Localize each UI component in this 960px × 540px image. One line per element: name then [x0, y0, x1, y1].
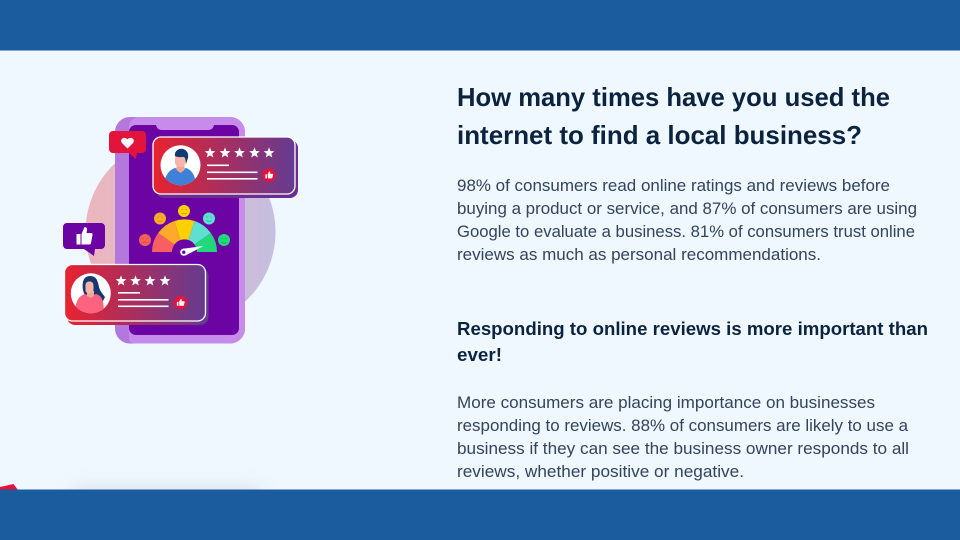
review card: four stars: [64, 264, 208, 325]
emoji: neutral: [178, 205, 190, 217]
review card: five stars: [153, 137, 298, 198]
second paragraph: responding to reviews. 88% of consumers are likely to use a: [457, 417, 909, 435]
subheading: ever!: [457, 344, 502, 365]
second paragraph: [457, 394, 909, 481]
illustration: phone with reviews: [63, 117, 298, 344]
phone body: [115, 117, 245, 344]
main heading: [457, 82, 890, 150]
bottom band: [0, 490, 960, 540]
icon: heart speech bubble: [109, 131, 146, 159]
rating stars: [205, 147, 274, 158]
gauge needle: [180, 246, 204, 256]
subheading: Responding to online reviews is more important than: [457, 318, 928, 339]
avatar: man: [160, 145, 200, 187]
intro paragraph: buying a product or service, and 87% of consumers are using: [457, 200, 917, 218]
top band: [0, 0, 960, 50]
emoji: happy: [203, 212, 215, 224]
intro paragraph: Google to evaluate a business. 81% of consumers trust online: [457, 223, 915, 241]
subheading: [457, 318, 928, 365]
emoji: sad: [154, 212, 166, 224]
second paragraph: reviews, whether positive or negative.: [457, 463, 744, 481]
rating gauge: [139, 205, 230, 256]
main heading: internet to find a local business?: [457, 120, 862, 150]
intro paragraph: 98% of consumers read online ratings and reviews before: [457, 177, 890, 195]
emoji: angry: [139, 234, 151, 246]
gauge segments: [152, 219, 217, 252]
main heading: How many times have you used the: [457, 82, 890, 112]
rating stars: [116, 275, 170, 286]
review text lines: [118, 292, 168, 307]
background disc: [86, 137, 276, 327]
emoji: very happy: [218, 234, 230, 246]
review text lines: [207, 164, 258, 180]
second paragraph: business if they can see the business owner responds to all: [457, 440, 909, 458]
icon: thumbs up badge: [174, 296, 187, 309]
cropped shadow at bottom: [72, 488, 260, 502]
second paragraph: More consumers are placing importance on businesses: [457, 394, 875, 412]
icon: thumbs up speech bubble: [63, 223, 105, 256]
icon: thumbs up badge: [262, 168, 276, 182]
cropped red shape at bottom left: [0, 484, 18, 490]
intro paragraph: reviews as much as personal recommendations.: [457, 246, 821, 264]
intro paragraph: [457, 177, 917, 264]
avatar: woman: [71, 273, 111, 316]
